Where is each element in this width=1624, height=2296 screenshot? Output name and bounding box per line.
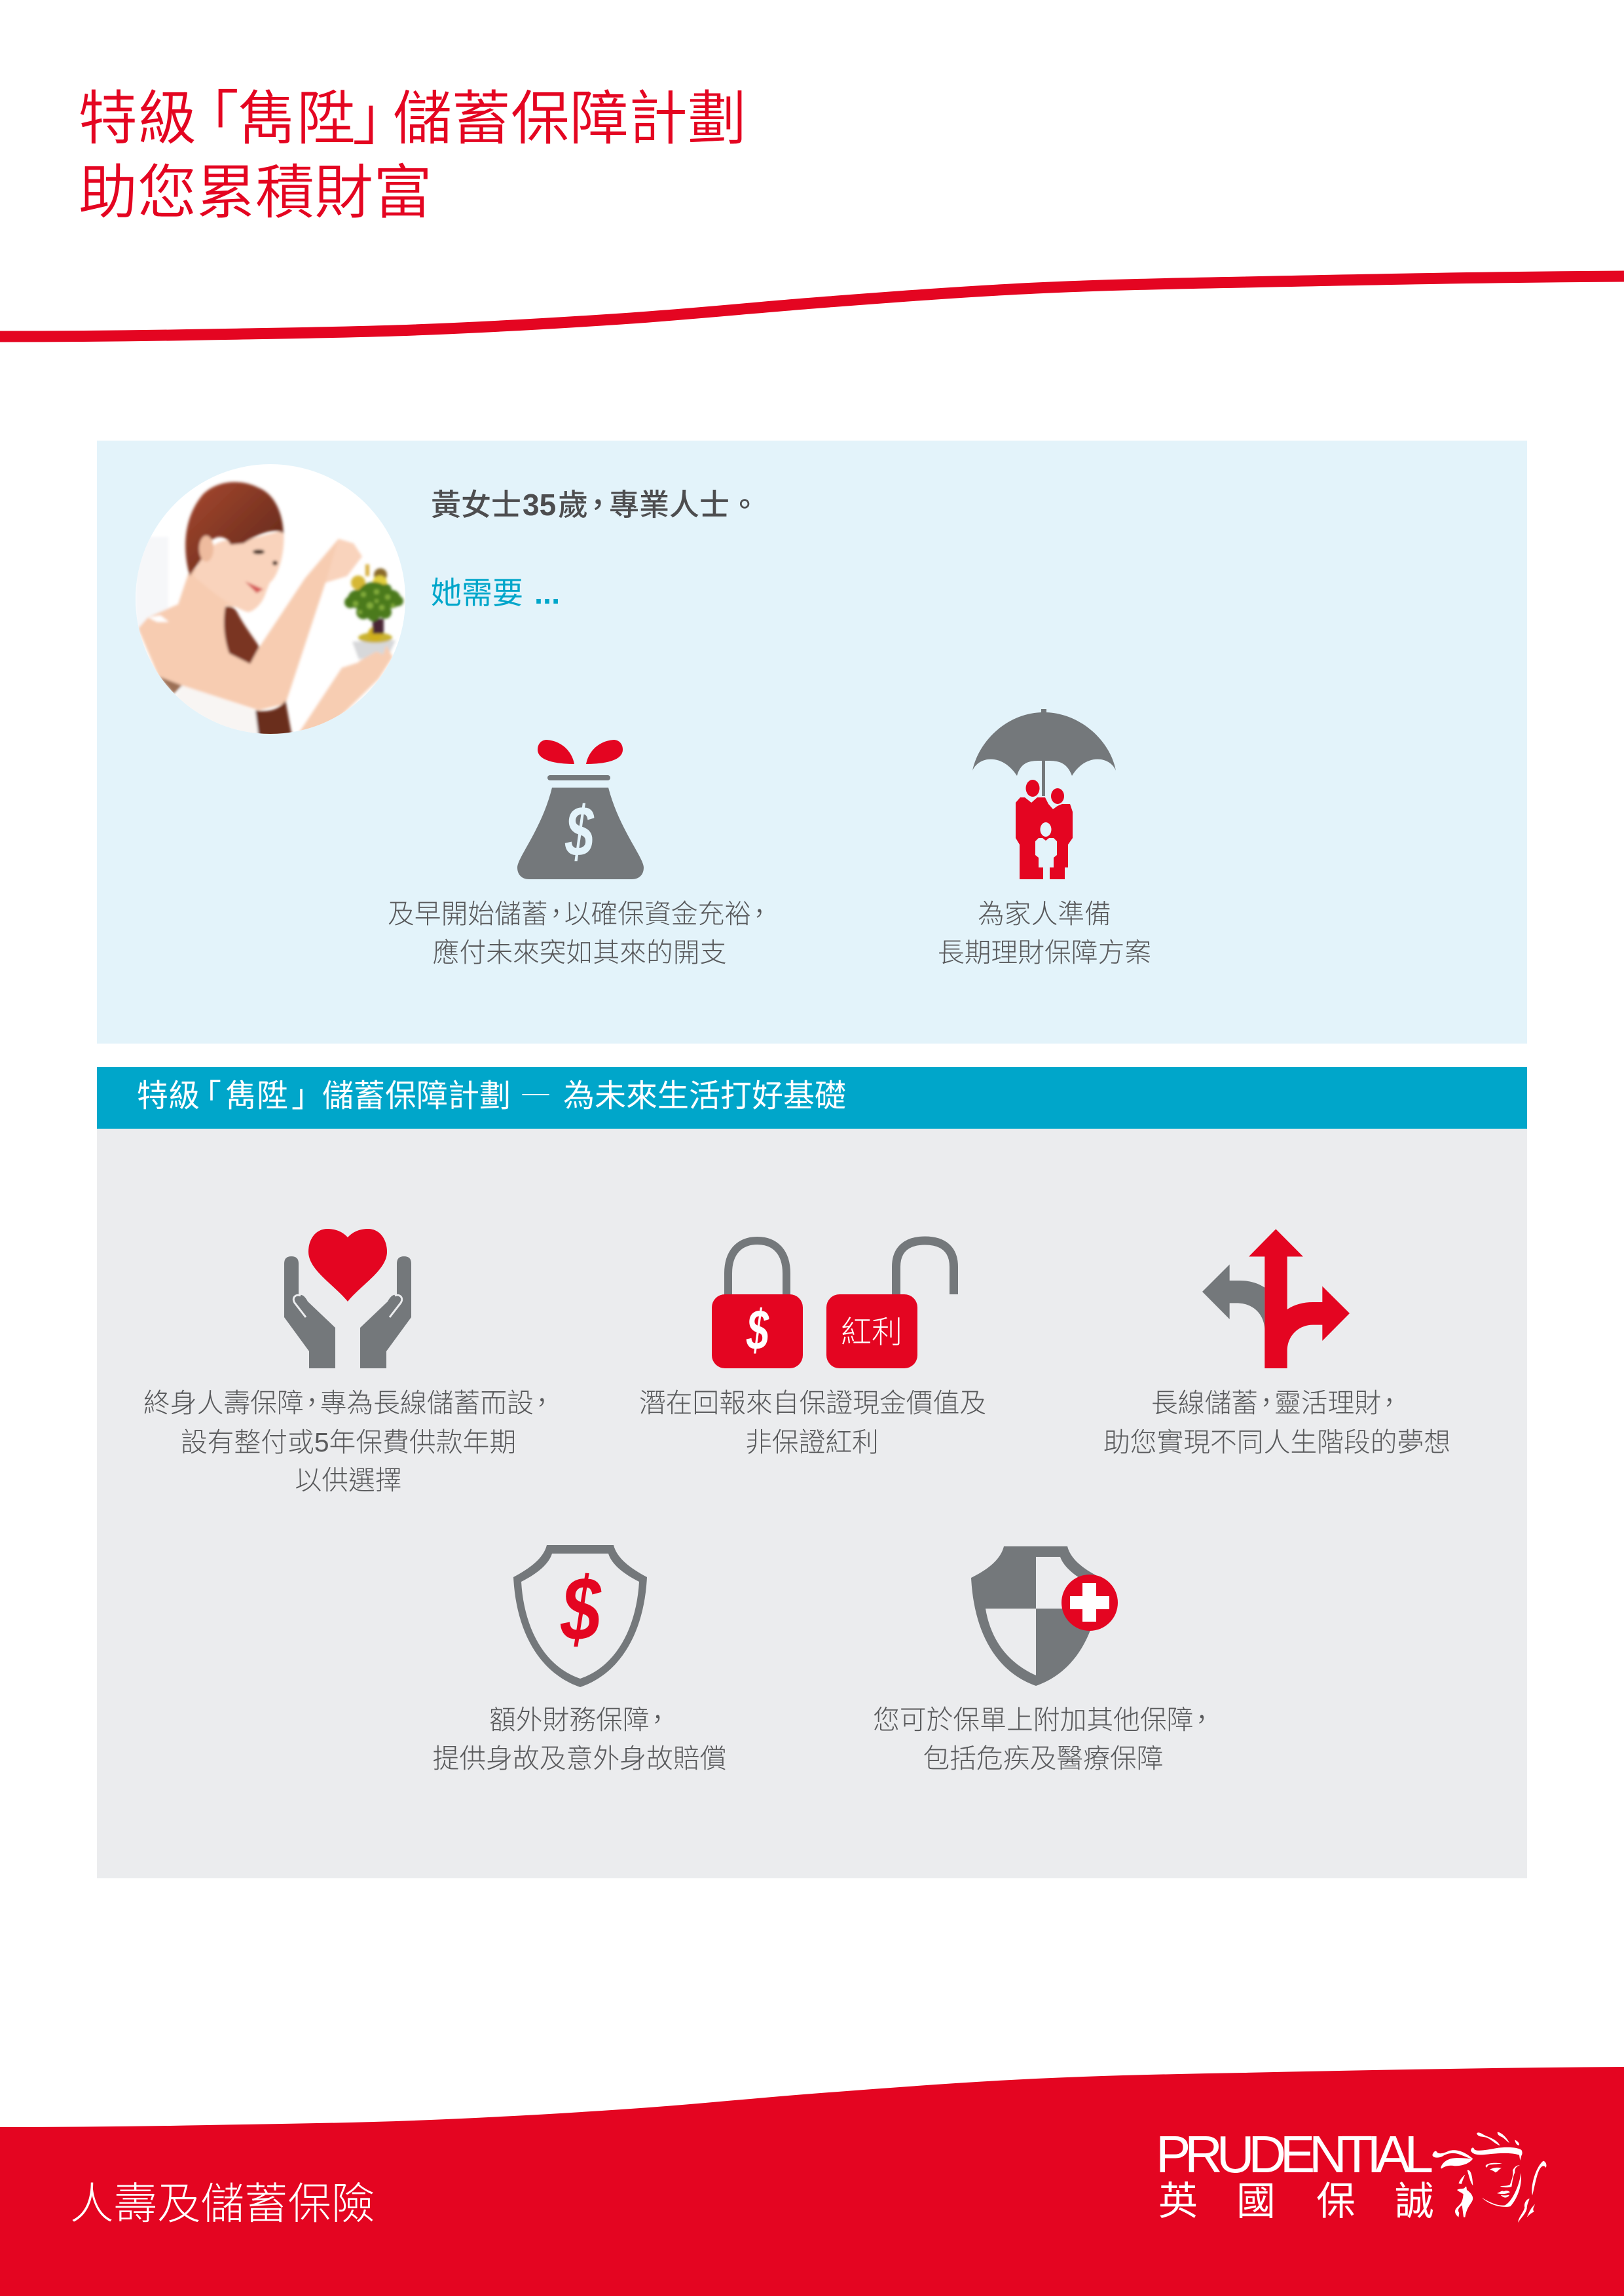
title: 儲蓄保障計劃 [393, 86, 747, 152]
icon: money bag [517, 740, 644, 879]
photo: woman with money tree [136, 464, 405, 737]
text: save early: 應付未來突如其來的開支 [433, 938, 726, 968]
title: 雋陞 [238, 86, 356, 152]
text: flexible: 助您實現不同人生階段的夢想 [1103, 1427, 1450, 1457]
intro text: 35 [523, 488, 556, 522]
icon: locks [712, 1241, 953, 1368]
text: extra protection: 額外財務保障， [489, 1705, 671, 1735]
logo: Prudential: 保 [1316, 2179, 1356, 2223]
logo: Prudential: 英 [1158, 2179, 1198, 2223]
text: potential return: 非保證紅利 [745, 1427, 879, 1457]
title: 特級 [79, 86, 196, 152]
heading bar: — [520, 1070, 551, 1116]
text: flexible: 長線儲蓄，靈活理財， [1151, 1388, 1403, 1418]
logo: Prudential: PRUDENTIAL [1156, 2125, 1433, 2183]
text: save early [388, 899, 773, 968]
icon: shield with dollar [513, 1545, 647, 1687]
title: 助您累積財富 [79, 160, 432, 226]
text: whole life: 以供選擇 [295, 1465, 402, 1495]
text: save early: 及早開始儲蓄，以確保資金充裕， [388, 899, 773, 929]
she needs: ... [534, 575, 560, 610]
intro text: 歲 [558, 488, 588, 522]
text: family protection [938, 899, 1151, 968]
logo: Prudential [1156, 2125, 1546, 2223]
footer band [0, 2067, 1624, 2296]
logo: Prudential: 誠 [1395, 2179, 1434, 2223]
panel: plan features [97, 1067, 1527, 1878]
text: whole life: 終身人壽保障，專為長線儲蓄而設， [143, 1388, 555, 1418]
text: potential return [639, 1388, 986, 1457]
text: riders: 包括危疾及醫療保障 [923, 1743, 1164, 1774]
text: flexible [1103, 1388, 1450, 1457]
icon: direction arrows [1202, 1229, 1350, 1368]
text: riders: 您可於保單上附加其他保障， [873, 1705, 1215, 1735]
title: 」 [352, 86, 411, 152]
heading bar: 為未來生活打好基礎 [563, 1079, 846, 1114]
text: whole life: 設有整付或5年保費供款年期 [181, 1427, 516, 1457]
heading bar: 「 [190, 1079, 221, 1114]
title: 「 [180, 86, 239, 152]
heading bar: 」 [291, 1079, 323, 1114]
intro text: ， [583, 488, 613, 522]
icon: shield with dollar: $ [561, 1559, 602, 1660]
title [79, 86, 747, 226]
icon: locks: 紅利 [841, 1315, 902, 1349]
heading bar: 雋陞 [225, 1079, 288, 1114]
icon: locks: $ [746, 1298, 769, 1361]
footer label: 人壽及儲蓄保險 [70, 2180, 375, 2229]
heading bar: 儲蓄保障計劃 [322, 1079, 511, 1114]
icon: shield with cross [971, 1546, 1118, 1686]
heading bar [97, 1067, 1527, 1129]
icon: umbrella family [972, 709, 1116, 879]
intro text: 黃女士 [431, 488, 521, 522]
text: family protection: 長期理財保障方案 [938, 938, 1151, 968]
text: whole life [143, 1388, 555, 1495]
text: family protection: 為家人準備 [978, 899, 1111, 929]
icon: hands and heart [284, 1229, 411, 1368]
text: potential return: 潛在回報來自保證現金價值及 [639, 1388, 986, 1418]
text: riders [873, 1705, 1215, 1774]
she needs: 她需要 [431, 575, 523, 610]
logo: Prudential: 國 [1236, 2179, 1276, 2223]
intro text: 專業人士。 [609, 488, 760, 522]
text: extra protection: 提供身故及意外身故賠償 [433, 1743, 726, 1774]
panel: customer needs [97, 441, 1527, 1044]
icon: money bag: $ [564, 792, 595, 871]
heading bar: 特級 [137, 1079, 200, 1114]
text: extra protection [433, 1705, 726, 1774]
header red wave [0, 276, 1624, 337]
